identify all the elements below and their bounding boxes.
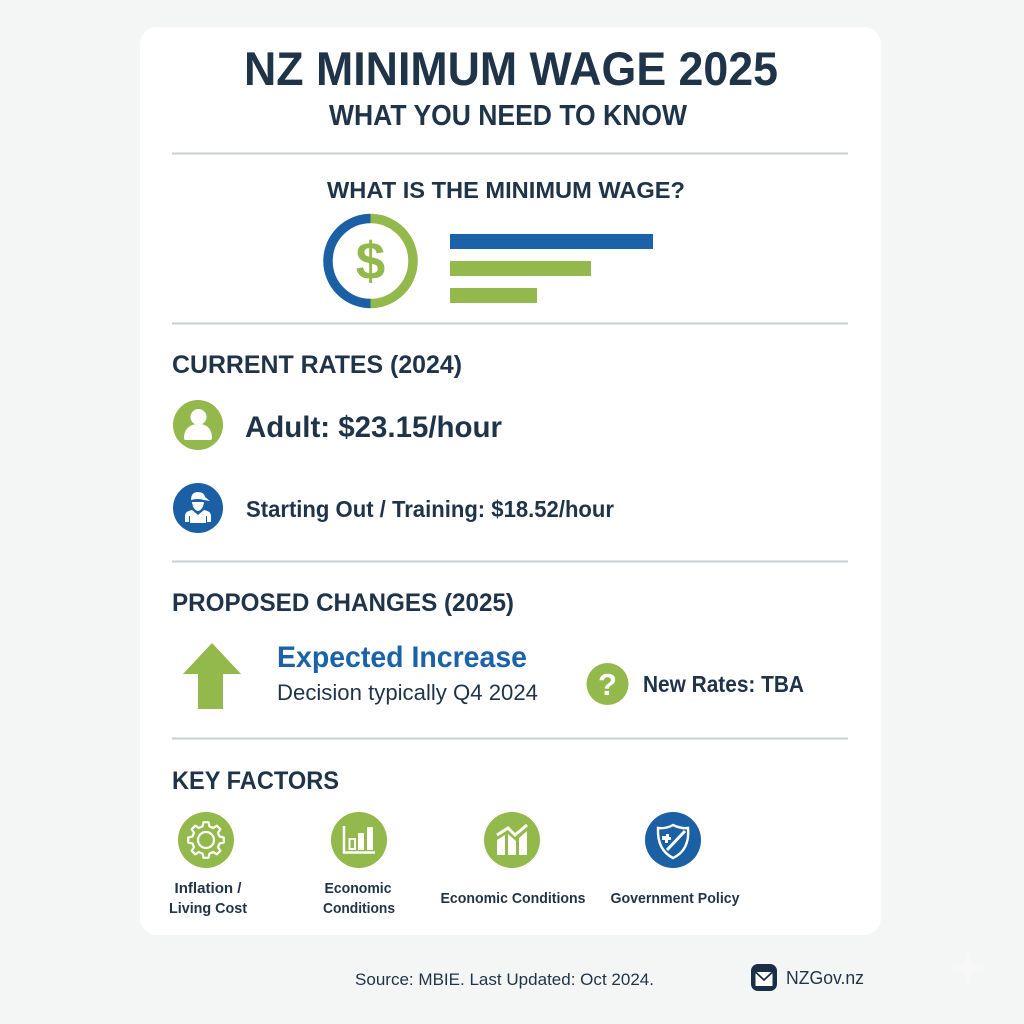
factor: government policy: Government Policy	[610, 890, 740, 907]
factor: inflation: Living Cost	[169, 900, 247, 917]
icon: dollar ring: $	[356, 232, 385, 291]
title: NZ MINIMUM WAGE 2025	[244, 42, 778, 95]
factor: government policy	[610, 812, 740, 907]
heading: key factors: KEY FACTORS	[172, 767, 339, 795]
icon: question mark: ?	[598, 667, 617, 702]
icon: dollar ring	[328, 218, 413, 304]
icon: starting out worker	[173, 483, 223, 533]
decorative sparkle	[948, 950, 988, 988]
text: website: NZGov.nz	[786, 968, 864, 988]
icon: adult	[173, 400, 223, 450]
panel: main card	[140, 27, 881, 935]
factor: economic conditions trend	[440, 812, 586, 907]
factor: inflation: Inflation /	[174, 880, 242, 897]
icon: mail	[751, 964, 777, 991]
bar chart	[450, 234, 653, 303]
source note: Source: MBIE. Last Updated: Oct 2024.	[355, 970, 654, 989]
icon: up arrow	[183, 643, 241, 709]
factor: inflation	[169, 812, 247, 917]
text: adult rate: Adult: $23.15/hour	[245, 411, 502, 444]
factor: economic conditions chart: Economic	[324, 880, 392, 897]
icon: question mark	[586, 663, 628, 705]
heading: proposed changes: PROPOSED CHANGES (2025)	[172, 589, 514, 617]
factor: economic conditions chart	[323, 812, 395, 917]
text: expected increase: Expected Increase	[277, 641, 527, 674]
heading: current rates: CURRENT RATES (2024)	[172, 351, 462, 379]
text: decision timing: Decision typically Q4 2024	[277, 680, 538, 705]
text: starting out rate: Starting Out / Training: $18.52/hour	[246, 496, 614, 522]
factor: economic conditions trend: Economic Conditions	[440, 890, 586, 907]
subtitle: WHAT YOU NEED TO KNOW	[329, 100, 688, 132]
factor: economic conditions chart: Conditions	[323, 900, 395, 917]
text: new rates: New Rates: TBA	[643, 671, 804, 697]
heading: what is the minimum wage: WHAT IS THE MINIMUM WAGE?	[327, 177, 685, 203]
